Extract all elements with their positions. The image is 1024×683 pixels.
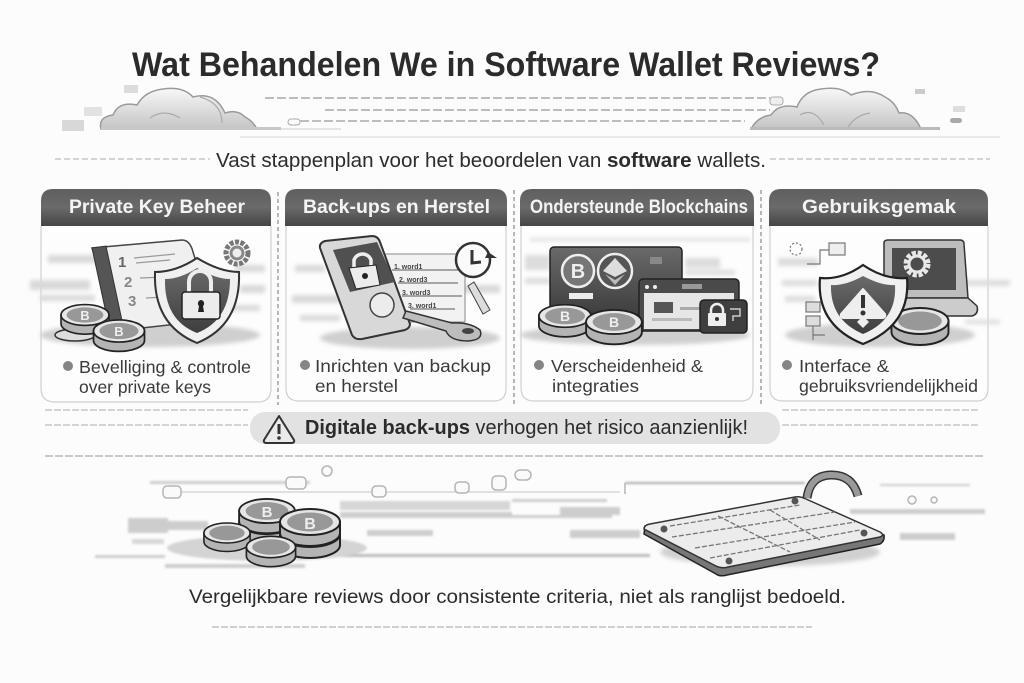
- icon: shield with padlock: [155, 258, 239, 343]
- icon: coin: [892, 308, 948, 345]
- icon: notebook: 1: [118, 254, 126, 271]
- icon: coin stack: [204, 499, 340, 567]
- lower divider: [45, 455, 985, 457]
- icon: coin stack: B: [304, 516, 316, 533]
- bullet text: gebruiksvriendelijkheid: [799, 376, 978, 396]
- icon: coin stack: B: [262, 504, 273, 521]
- icon: circuit: [790, 243, 845, 340]
- icon: coins: B: [114, 324, 124, 339]
- icon: word list: [380, 254, 465, 322]
- bullet text: over private keys: [79, 377, 211, 397]
- icon: warning triangle: [264, 416, 294, 443]
- heading: Private Key Beheer: Private Key Beheer: [69, 197, 246, 218]
- bullet text: [300, 356, 491, 396]
- icon: word list: 3. word1: [408, 303, 437, 310]
- background smudges: [30, 255, 265, 347]
- icon: seed plate: [644, 497, 884, 576]
- icon: notebook: 2: [124, 274, 132, 291]
- background smudges: [778, 258, 1010, 347]
- icon: coins: [539, 305, 642, 344]
- icon: key: [403, 311, 481, 341]
- bullet text: en herstel: [315, 376, 398, 396]
- icon: dashboard screen: B: [571, 261, 585, 283]
- background smudges: [292, 265, 500, 349]
- decorative cloud: left: [62, 85, 341, 131]
- bullet text: [63, 357, 251, 397]
- icon: backup device: [320, 236, 410, 339]
- heading: Back-ups en Herstel: Back-ups en Herstel: [303, 197, 490, 218]
- panel: Gebruiksgemak: [769, 189, 1010, 401]
- decorative cloud: right: [750, 88, 965, 130]
- icon: coins: B: [609, 314, 619, 330]
- bullet text: Inrichten van backup: [315, 356, 491, 376]
- bullet text: Bevelliging & controle: [79, 357, 251, 377]
- icon: dashboard screen: [550, 247, 682, 315]
- panel: Back-ups en Herstel: [285, 189, 507, 401]
- icon: coins: B: [80, 308, 90, 323]
- vertical dividers: [278, 190, 761, 405]
- title: Wat Behandelen We in Software Wallet Reviews?: [132, 46, 880, 84]
- footer statement: Vergelijkbare reviews door consistente criteria, niet als ranglijst bedoeld.: [189, 587, 846, 608]
- panel: Private Key Beheer: [30, 189, 271, 402]
- icon: coins: [55, 305, 144, 351]
- bullet text: Interface &: [799, 356, 889, 376]
- panel: Ondersteunde Blockchains: [520, 189, 754, 401]
- icon: word list: 3. word3: [402, 290, 431, 297]
- heading: Ondersteunde Blockchains: Ondersteunde Blockchains: [530, 197, 748, 218]
- footer dashed line: [212, 626, 812, 628]
- icon: lock card: [700, 300, 747, 333]
- icon: shield with warning: [820, 265, 907, 344]
- callout: warning pill: [250, 412, 780, 444]
- background network bands: [95, 466, 985, 568]
- icon: laptop with gear: [880, 240, 977, 316]
- icon: word list: 1. word1: [394, 264, 423, 271]
- bullet text: [782, 356, 978, 396]
- icon: browser window: [639, 279, 739, 331]
- subtitle: Vast stappenplan voor het beoordelen van software wallets.: [216, 150, 766, 172]
- icon: clock: [456, 243, 497, 314]
- background smudges: [520, 238, 750, 345]
- icon: coins: B: [560, 308, 570, 324]
- heading: Gebruiksgemak: Gebruiksgemak: [802, 197, 956, 218]
- icon: gear: [226, 242, 248, 264]
- icon: notebook: [92, 240, 214, 330]
- bullet text: integraties: [552, 376, 639, 396]
- icon: word list: 2. word3: [399, 277, 428, 284]
- icon: open padlock shackle: [807, 475, 858, 498]
- icon: notebook: 3: [128, 293, 136, 310]
- bullet text: [534, 356, 703, 396]
- header dashed lines: [43, 98, 1000, 159]
- callout text: Digitale back-ups verhogen het risico aanzienlijk!: [305, 417, 748, 439]
- warning lines: [45, 410, 980, 425]
- bullet text: Verscheidenheid &: [551, 356, 703, 376]
